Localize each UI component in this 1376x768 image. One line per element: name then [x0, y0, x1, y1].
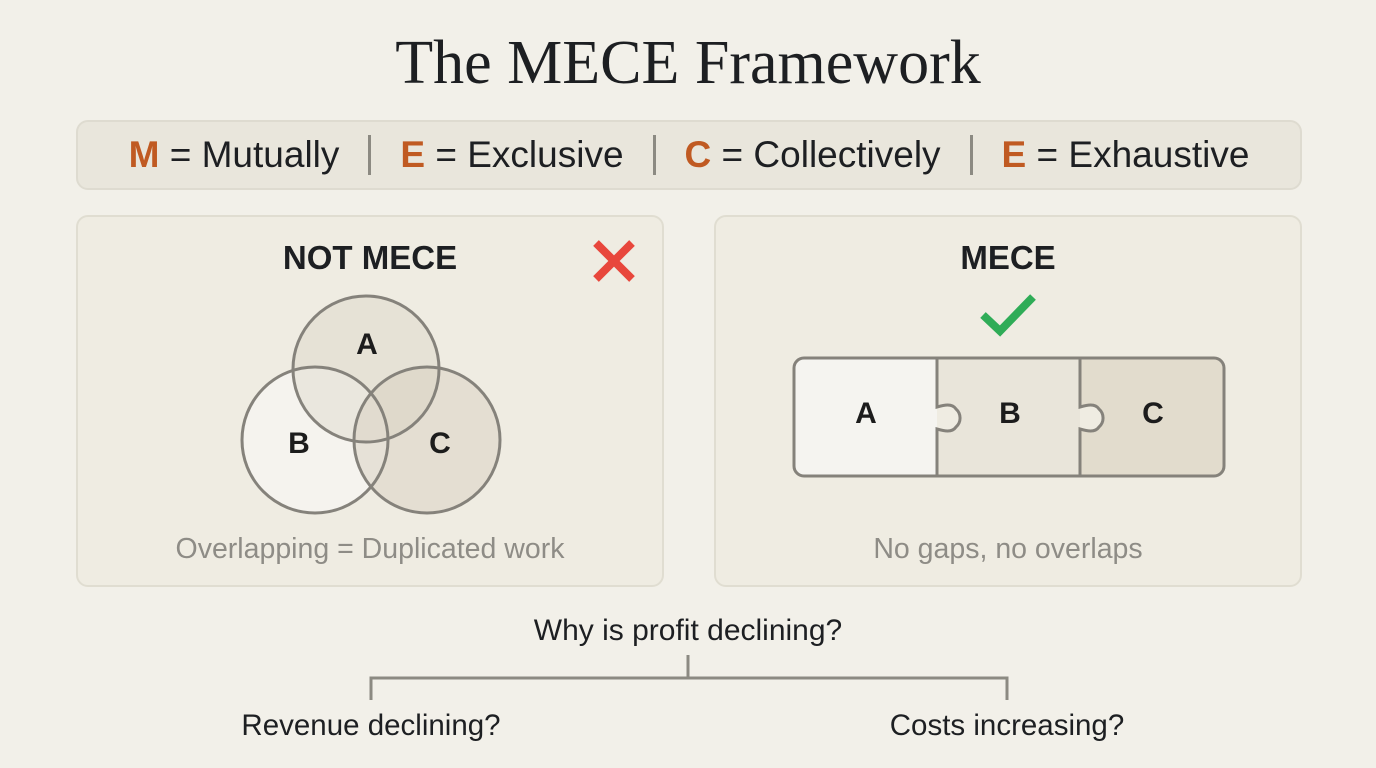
- venn diagram: [240, 294, 502, 514]
- venn diagram: B: [288, 427, 310, 460]
- puzzle pieces: [792, 356, 1226, 478]
- legend bar: C = Collectively: [685, 134, 941, 175]
- caption: no gaps: No gaps, no overlaps: [873, 533, 1143, 565]
- panel: mece: [714, 215, 1302, 587]
- puzzle pieces: A: [855, 397, 877, 430]
- venn diagram: A: [356, 328, 378, 361]
- legend bar: E = Exclusive: [400, 134, 624, 175]
- branch: costs: Costs increasing?: [890, 709, 1124, 742]
- tree diagram: [241, 614, 1124, 742]
- puzzle pieces: C: [1142, 397, 1164, 430]
- venn diagram: C: [429, 427, 451, 460]
- legend bar: [76, 120, 1302, 190]
- connector lines: [370, 655, 1008, 700]
- root question: Why is profit declining?: [534, 614, 842, 647]
- icon: red cross: [593, 240, 635, 282]
- puzzle pieces: B: [999, 397, 1021, 430]
- heading: not mece: NOT MECE: [283, 239, 457, 276]
- branch: revenue: Revenue declining?: [241, 709, 501, 742]
- icon: green check: [980, 294, 1036, 337]
- caption: overlapping: Overlapping = Duplicated work: [176, 533, 564, 565]
- title: The MECE Framework: [395, 29, 981, 97]
- panel: not mece: [76, 215, 664, 587]
- legend bar: E = Exhaustive: [1002, 134, 1249, 175]
- heading: mece: MECE: [960, 239, 1056, 276]
- legend bar: M = Mutually: [129, 134, 339, 175]
